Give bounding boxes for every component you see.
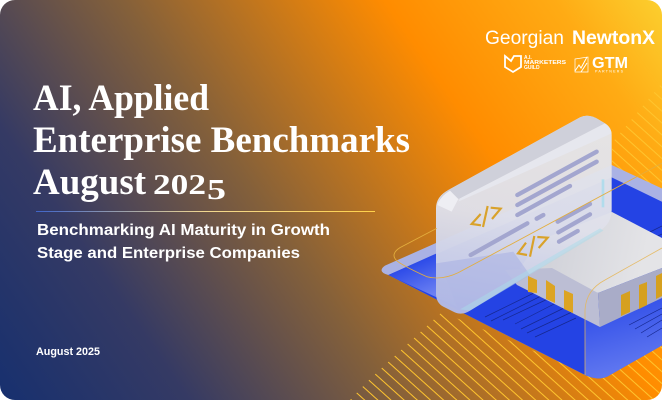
title: August	[33, 162, 147, 203]
logo: AI Marketers Guild: GUILD	[524, 65, 540, 71]
circuit lines	[485, 226, 662, 337]
outline frame left	[394, 161, 662, 278]
top face	[538, 212, 662, 293]
card lower tint	[436, 252, 530, 314]
hatch pattern: lower	[350, 312, 662, 400]
title: 202	[153, 169, 206, 201]
glass card	[436, 116, 612, 314]
outline frame right	[585, 248, 662, 375]
logo: AI Marketers Guild: A.I.	[524, 55, 532, 61]
platform	[382, 165, 662, 378]
text bars on card	[471, 152, 597, 255]
chip block	[505, 212, 662, 327]
hatch pattern: upper right	[612, 83, 662, 190]
divider rule	[36, 211, 375, 212]
subtitle: Stage and Enterprise Companies	[37, 245, 300, 262]
right face	[598, 268, 662, 327]
subtitle: Benchmarking AI Maturity in Growth	[37, 222, 330, 239]
title: AI, Applied	[33, 78, 209, 119]
title: Enterprise Benchmarks	[33, 120, 410, 161]
logo: GTM Partners: GTM	[592, 55, 628, 72]
card top bevel	[438, 116, 605, 204]
title	[33, 78, 410, 206]
subtitle	[37, 222, 330, 262]
title: 5	[207, 174, 226, 206]
date: August 2025	[36, 346, 100, 358]
logo: GTM Partners	[574, 56, 627, 72]
logo: AI Marketers Guild	[505, 55, 567, 72]
icon: code brackets top	[472, 206, 501, 227]
gold stripes	[528, 276, 573, 313]
logo: AI Marketers Guild: MARKETERS	[524, 60, 567, 66]
illustration: isometric platform, chip and glass card	[382, 116, 662, 378]
card edge tint	[460, 228, 603, 311]
left face	[515, 268, 600, 327]
logo: GTM Partners: PARTNERS	[595, 70, 624, 74]
logo: NewtonX: NewtonX	[572, 28, 655, 49]
icon: code brackets bottom	[518, 236, 548, 257]
logo: Georgian: Georgian	[485, 28, 564, 49]
